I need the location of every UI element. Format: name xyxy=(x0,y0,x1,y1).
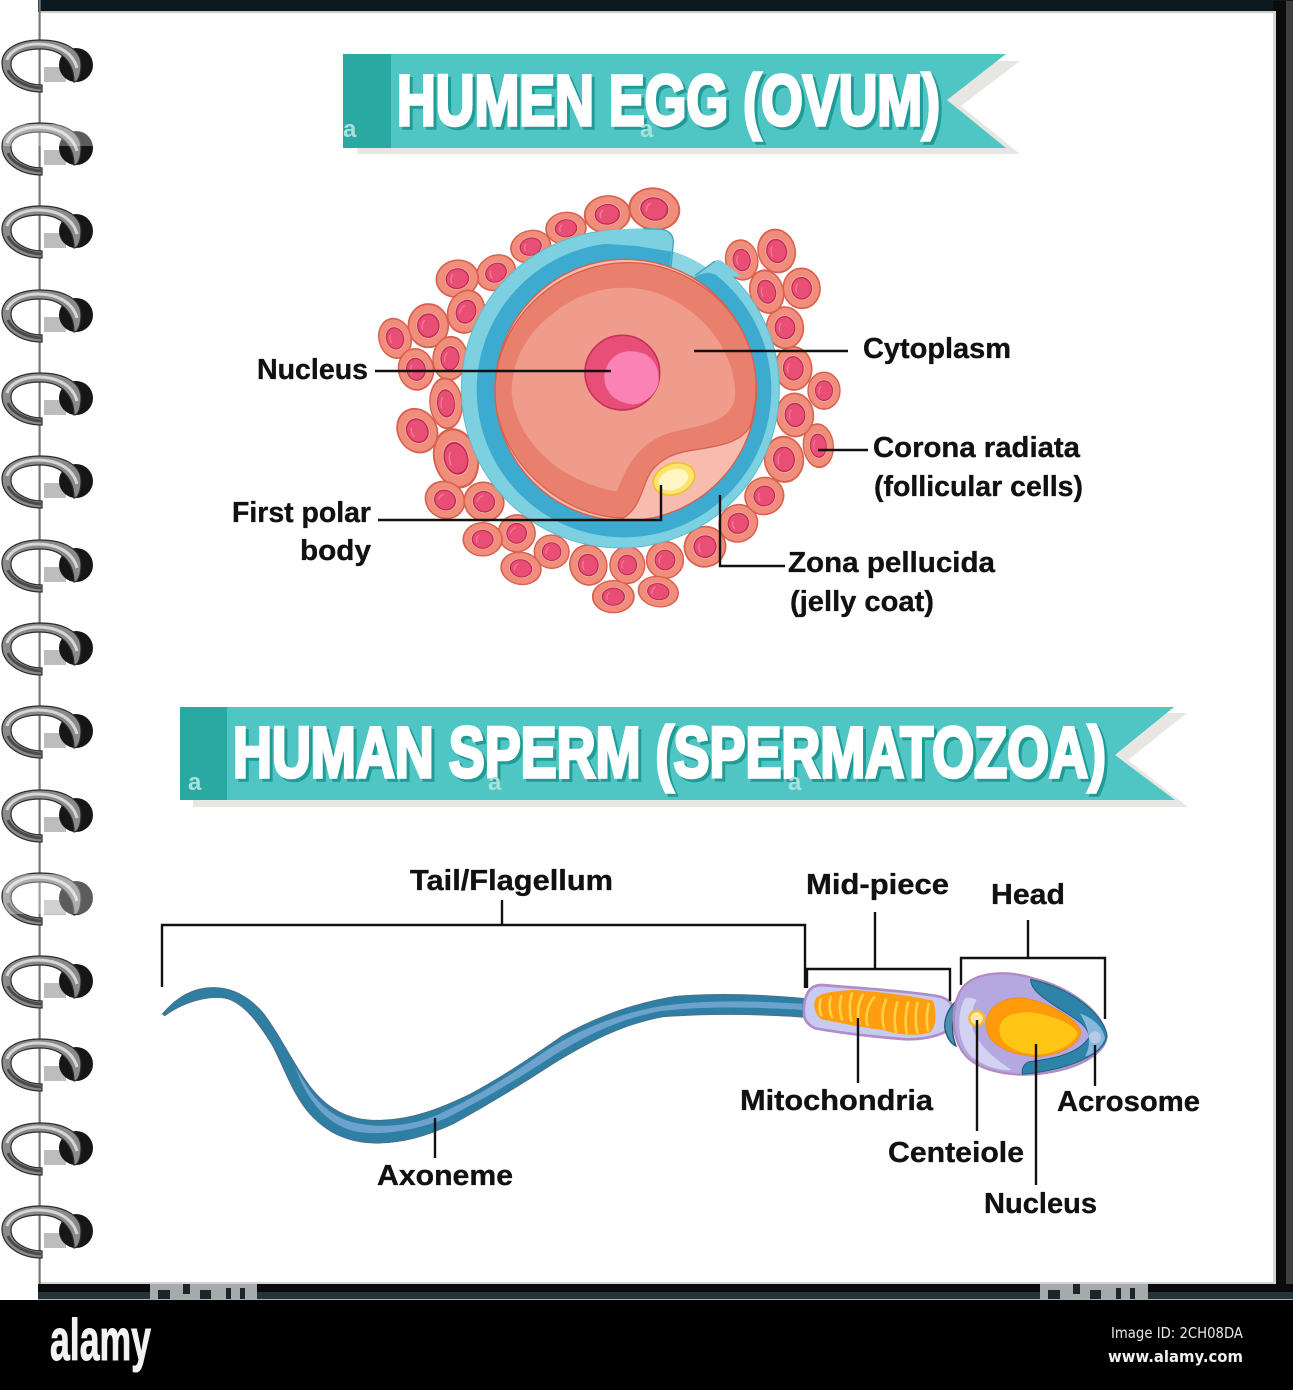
egg labels: (jelly coat) xyxy=(790,586,934,618)
sperm labels xyxy=(377,865,1200,1220)
banner: human sperm title: a xyxy=(488,769,502,796)
spiral binding rings xyxy=(2,40,93,1258)
nucleus xyxy=(585,335,660,410)
sperm labels: Tail/Flagellum xyxy=(410,865,613,897)
egg diagram xyxy=(374,184,840,613)
footer bar: www.alamy.com xyxy=(1108,1347,1243,1366)
footer bar xyxy=(0,1299,1293,1390)
egg labels: Nucleus xyxy=(257,354,368,386)
egg labels: First polar xyxy=(232,497,371,529)
egg pointer lines xyxy=(375,351,868,566)
banner: human egg title: HUMEN EGG (OVUM) xyxy=(400,65,943,144)
sperm labels: Centeiole xyxy=(888,1137,1024,1169)
sperm nucleus xyxy=(986,998,1081,1057)
sperm tail xyxy=(163,988,807,1143)
mid-piece xyxy=(804,985,952,1039)
neck collar xyxy=(945,997,962,1046)
sperm brackets and pointer lines xyxy=(162,900,1105,1185)
cytoplasm xyxy=(495,263,756,518)
banner: human egg title: a xyxy=(343,116,357,143)
sperm mid-piece and head xyxy=(804,973,1107,1075)
sperm labels: Nucleus xyxy=(984,1188,1097,1220)
clipped watermark strips on frame xyxy=(150,1284,1148,1299)
sperm labels: Mid-piece xyxy=(806,869,949,901)
banner: human sperm title: a xyxy=(788,769,802,796)
oocyte pale region xyxy=(495,259,756,521)
banner: human sperm title: a xyxy=(188,769,202,796)
banner: human egg title: HUMEN EGG (OVUM) xyxy=(397,62,940,141)
egg labels: Cytoplasm xyxy=(863,333,1011,365)
banner: human sperm title xyxy=(180,707,1188,807)
footer bar: alamy xyxy=(50,1308,151,1373)
sperm labels: Acrosome xyxy=(1057,1086,1200,1118)
footer bar: Image ID: 2CH08DA xyxy=(1111,1324,1243,1342)
egg labels: body xyxy=(300,535,371,567)
egg labels: Corona radiata xyxy=(873,432,1081,464)
corona radiata cells xyxy=(374,184,840,613)
egg labels xyxy=(232,333,1083,618)
banner: human egg title xyxy=(343,54,1020,154)
sperm labels: Head xyxy=(991,879,1065,911)
sperm labels: Mitochondria xyxy=(740,1085,934,1117)
centriole xyxy=(969,1011,984,1026)
banner: human egg title: a xyxy=(640,116,654,143)
zona pellucida xyxy=(461,228,779,548)
egg labels: Zona pellucida xyxy=(788,547,996,579)
head xyxy=(954,973,1107,1075)
sperm labels: Axoneme xyxy=(377,1160,513,1192)
egg labels: (follicular cells) xyxy=(874,471,1083,503)
first polar body xyxy=(649,457,699,501)
